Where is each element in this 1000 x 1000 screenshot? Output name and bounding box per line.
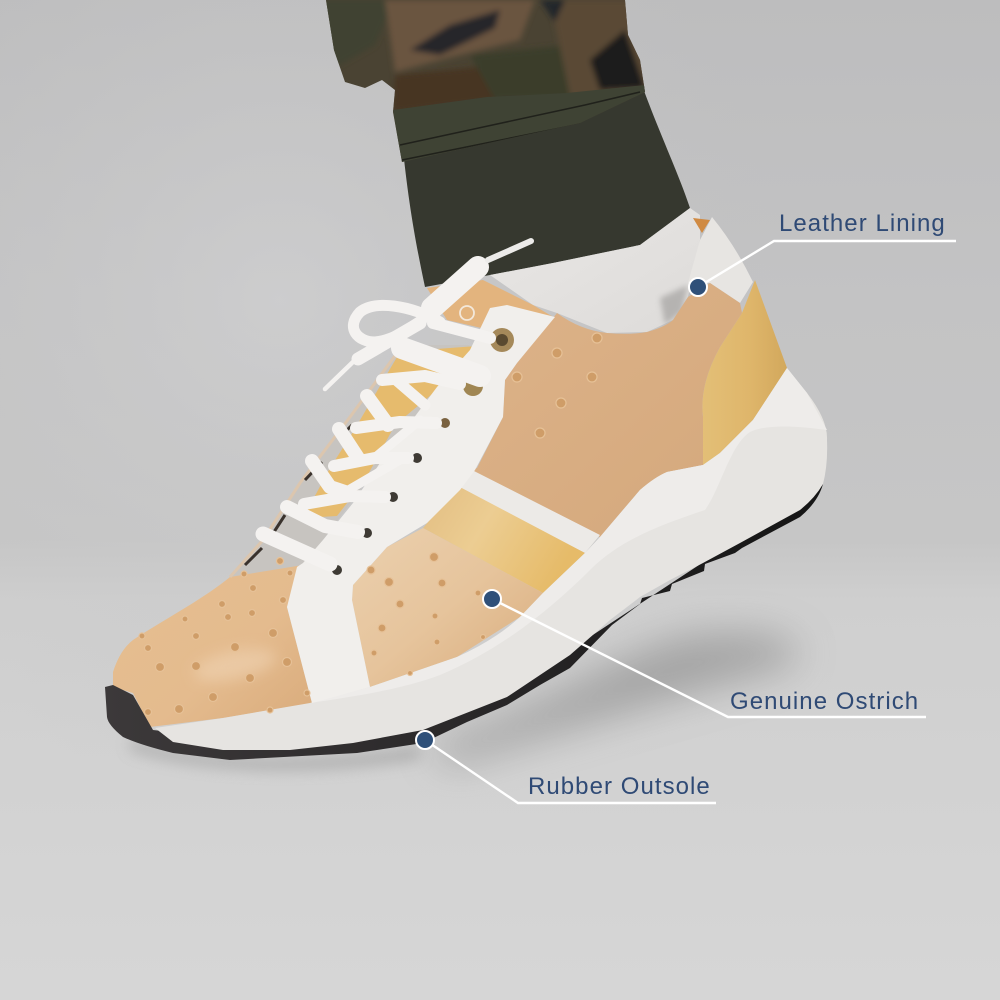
gold heel counter [702, 280, 787, 465]
ribbed cuff [402, 80, 690, 287]
heel lining tip [693, 218, 710, 233]
black rubber outsole [105, 484, 823, 760]
trouser leg [320, 0, 650, 170]
callout: Leather Lining [689, 210, 956, 296]
callout: Leather Lining: Leather Lining [779, 210, 946, 237]
callout: Rubber Outsole: Rubber Outsole [528, 773, 711, 800]
lace throat with gold tongue [230, 345, 490, 577]
tongue top [427, 280, 555, 330]
white eyestay and saddle [287, 305, 555, 703]
white sock [490, 208, 700, 333]
ostrich quill bumps [139, 333, 602, 716]
rear quarter ostrich panel [465, 283, 742, 537]
callout: Rubber Outsole [416, 731, 716, 803]
floor shadow [130, 632, 799, 771]
white midsole [155, 368, 827, 750]
heel collar tab [688, 217, 753, 303]
vamp ostrich panel [352, 528, 543, 687]
white laces [263, 241, 531, 564]
white stripe [455, 470, 600, 553]
toe ostrich panel [113, 548, 312, 727]
gold band [423, 486, 585, 593]
callout: Genuine Ostrich: Genuine Ostrich [730, 688, 919, 715]
callout: Genuine Ostrich [483, 590, 926, 717]
eyelets [332, 328, 514, 575]
